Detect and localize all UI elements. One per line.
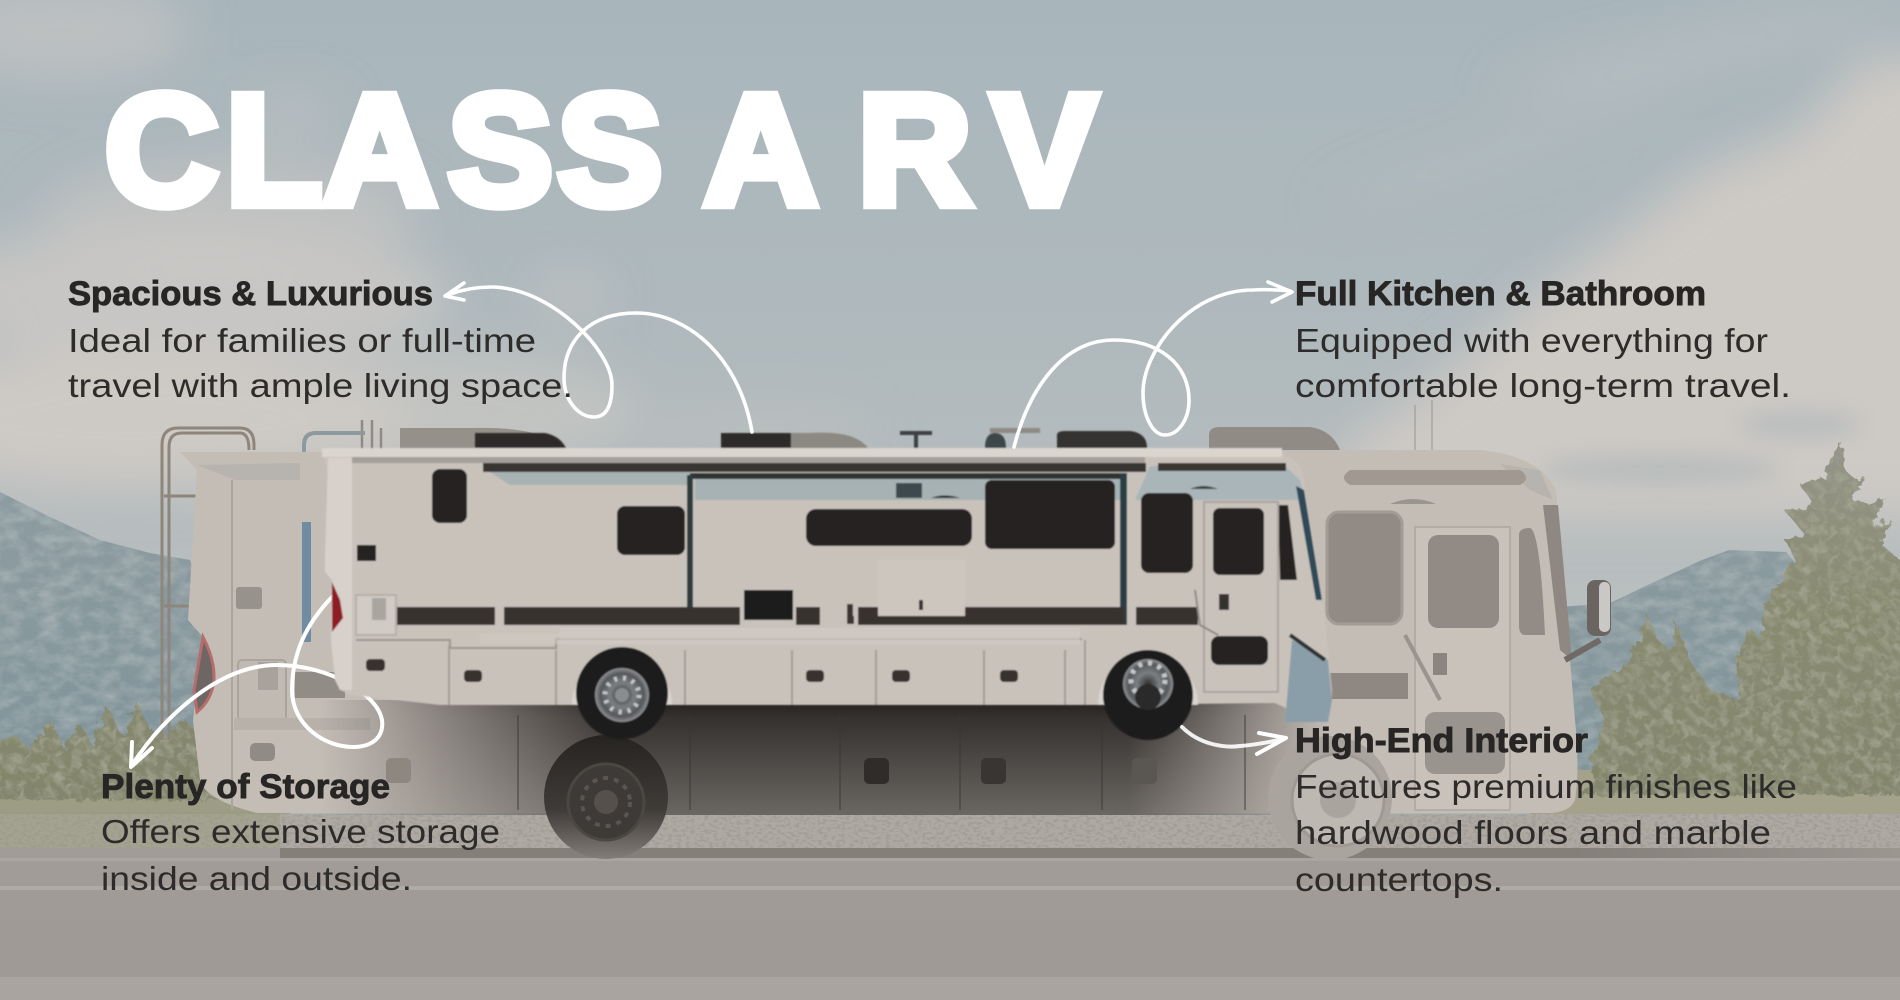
rear RV body [180,450,1578,813]
front RV front wheel [1098,650,1198,740]
arrow: to High-End Interior [1182,727,1286,754]
front RV roof line [322,448,1282,457]
callout: Plenty of Storage [101,768,500,898]
arrow: to Full Kitchen & Bathroom [1014,282,1292,447]
callout: Plenty of Storage: Offers extensive storage [101,814,500,851]
callout: High-End Interior: hardwood floors and marble [1295,815,1771,852]
front RV body shell [322,450,1332,723]
callout: High-End Interior: High-End Interior [1295,722,1588,760]
front RV trim lines [356,639,1082,648]
callout: Spacious & Luxurious: Spacious & Luxurious [68,275,433,313]
callout: Full Kitchen & Bathroom [1295,275,1791,405]
front RV rear pillar [325,458,352,690]
callout: Spacious & Luxurious: travel with ample living space. [68,368,573,405]
callout: Full Kitchen & Bathroom: Full Kitchen & Bathroom [1295,275,1706,313]
background: trees [0,441,1900,850]
rear RV rear panels [234,587,370,730]
callout: Spacious & Luxurious: Ideal for families or full-time [68,323,536,360]
rear RV side mirror [1565,580,1611,660]
front RV windshield edge [1285,486,1332,722]
front RV side stripe [396,590,1198,625]
callout: Spacious & Luxurious [68,275,573,405]
background: sky with clouds [0,0,1900,700]
callout: High-End Interior: Features premium finishes like [1295,769,1797,806]
rear RV roof units [362,400,1432,450]
rear RV taillight [194,637,214,712]
background: mountains [0,492,1880,800]
callout: Plenty of Storage: Plenty of Storage [101,768,390,806]
rear RV front wheel [1268,736,1392,860]
callout: Full Kitchen & Bathroom: comfortable long-term travel. [1295,368,1791,405]
rear RV awning [1344,470,1526,485]
front RV storage bays [366,640,1085,705]
callout: Plenty of Storage: inside and outside. [101,861,412,898]
rear RV rear wheel [544,735,668,859]
front RV awning rail and slide frame [483,463,1305,625]
arrow: to Plenty of Storage [131,597,382,767]
title: CLASS A RV [105,63,1097,238]
front RV windows [357,469,1297,665]
front RV: sharp side-view motorhome [322,428,1332,740]
callout: High-End Interior [1295,722,1797,899]
front RV roof units [475,428,1147,448]
background: gravel and road [0,812,1900,1000]
front RV tail light [332,582,343,632]
arrow: to Spacious & Luxurious [445,283,752,432]
rear RV second ladder [304,433,365,640]
callout: High-End Interior: countertops. [1295,862,1503,899]
rear RV ladder [162,428,254,740]
callout: Full Kitchen & Bathroom: Equipped with everything for [1295,323,1768,360]
front RV slide panel and door [356,502,1278,692]
rear RV windows and door [1327,505,1572,810]
rear RV lower bays and shadow from upper RV [250,700,1330,815]
front RV rear wheel [572,647,672,739]
rear RV: faded full-size motorhome [162,400,1611,860]
